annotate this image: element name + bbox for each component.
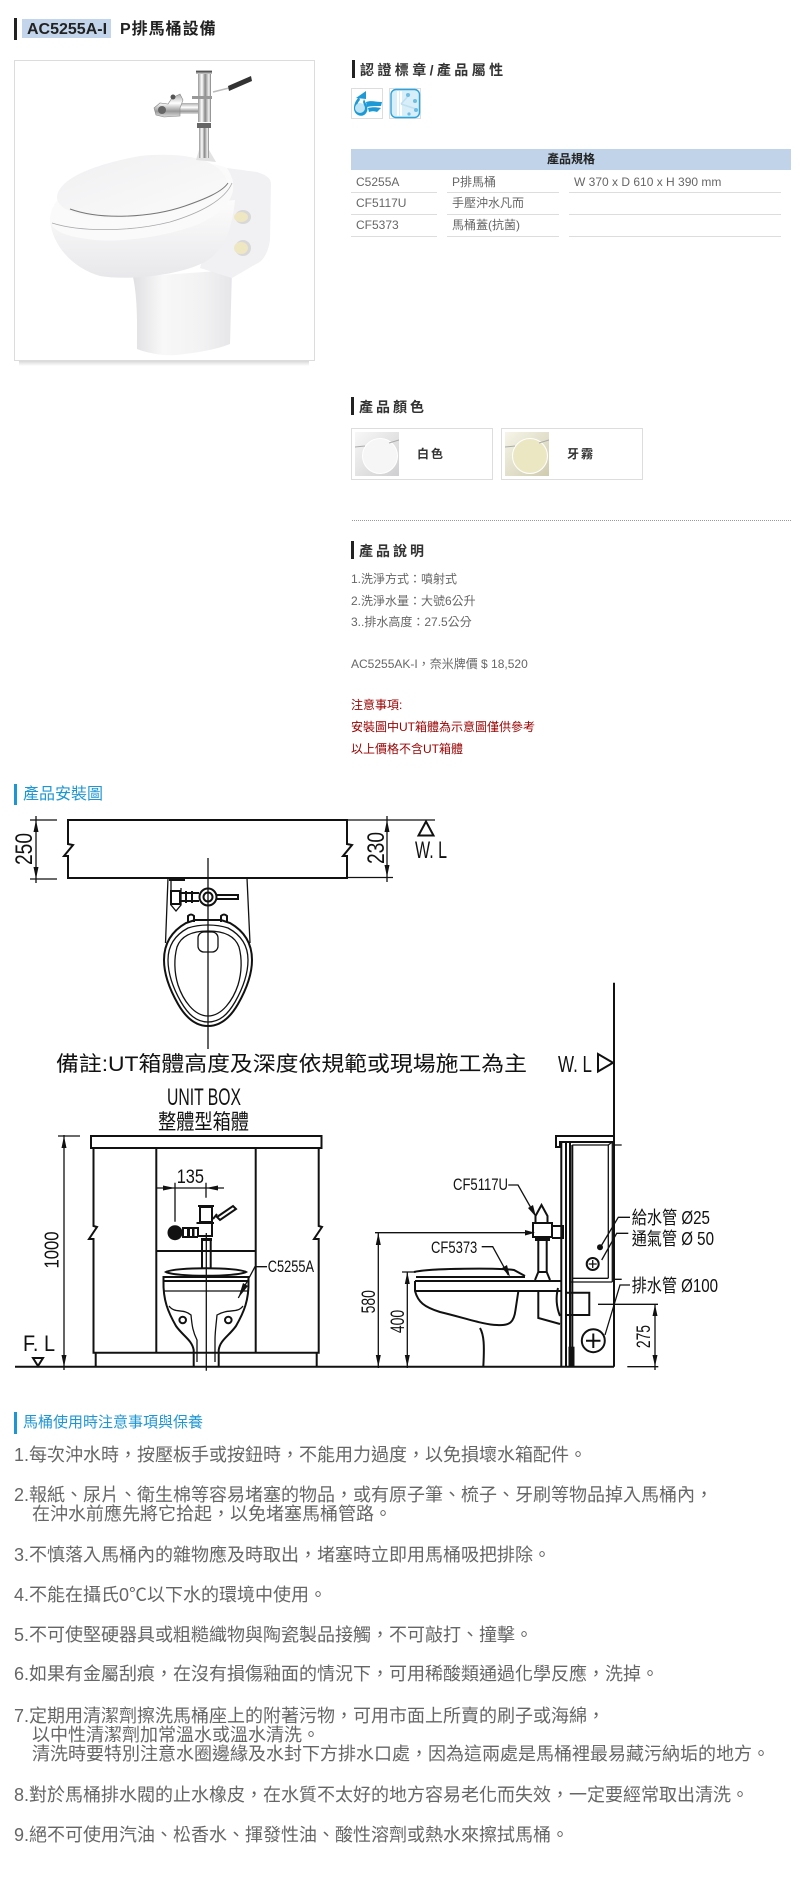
table: product specifications: P排馬桶 bbox=[452, 175, 496, 189]
text block: maintenance list: 9.絕不可使用汽油、松香水、揮發性油、酸性溶劑或熱水來擦拭馬桶。 bbox=[14, 1825, 569, 1845]
side elevation: water line and wall: W. L bbox=[558, 1051, 592, 1077]
table: product specifications: C5255A bbox=[356, 175, 399, 189]
text block: maintenance list: 4.不能在攝氏0℃以下水的環境中使用。 bbox=[14, 1585, 327, 1605]
front elevation: unit box: UNIT BOX bbox=[167, 1084, 241, 1111]
callout: red notes: 安裝圖中UT箱體為示意圖僅供參考 bbox=[351, 720, 535, 734]
plan view: wall section with dimensions: 230 bbox=[363, 832, 390, 864]
title: product model and name: P排馬桶設備 bbox=[120, 21, 217, 38]
heading: product colours: 產品顏色 bbox=[359, 399, 427, 415]
side elevation: wall unit box and piping bbox=[556, 1136, 718, 1370]
text block: maintenance list: 3.不慎落入馬桶內的雜物應及時取出，堵塞時立即用馬桶吸把排除。 bbox=[14, 1545, 551, 1565]
table: product specifications: 馬桶蓋(抗菌) bbox=[452, 218, 520, 232]
table: product specifications: 產品規格 bbox=[547, 152, 595, 166]
callout: red notes: 以上價格不含UT箱體 bbox=[351, 742, 463, 756]
text block: maintenance list: 2.報紙、尿片、衛生棉等容易堵塞的物品，或有原子筆、梳子、牙刷等物品掉入馬桶內， bbox=[14, 1485, 713, 1505]
dimensions: height of valve and seat bbox=[359, 1232, 416, 1368]
text block: maintenance list: 清洗時要特別注意水圈邊緣及水封下方排水口處，因為這兩處是馬桶裡最易藏污納垢的地方。 bbox=[32, 1744, 770, 1764]
chart: installation technical drawing bbox=[11, 816, 718, 1371]
table: product specifications: CF5117U bbox=[356, 196, 406, 210]
plan view: wall section with dimensions: W. L bbox=[415, 837, 447, 864]
text block: product description: 3..排水高度：27.5公分 bbox=[351, 615, 472, 629]
title: product model and name bbox=[14, 18, 217, 40]
text block: maintenance list: 8.對於馬桶排水閥的止水橡皮，在水質不太好的地方容易老化而失效，一定要經常取出清洗。 bbox=[14, 1785, 749, 1805]
front elevation: flush valve and toilet bbox=[163, 1206, 314, 1371]
side elevation: toilet profile with flush valve: CF5117U bbox=[453, 1175, 508, 1194]
text block: product description bbox=[351, 572, 528, 671]
callout: red notes: 注意事項: bbox=[351, 698, 402, 712]
table: product specifications: CF5373 bbox=[356, 218, 399, 232]
plan view: wall section with dimensions: 250 bbox=[11, 833, 38, 865]
heading: installation diagram: 產品安裝圖 bbox=[23, 786, 103, 803]
icon: toilet ceramic body bbox=[50, 155, 271, 355]
text block: maintenance list: 以中性清潔劑加常溫水或溫水清洗。 bbox=[32, 1725, 320, 1745]
table: product specifications bbox=[351, 149, 791, 237]
side elevation: toilet profile with flush valve bbox=[375, 1175, 563, 1367]
plan view: wall section with dimensions bbox=[11, 816, 447, 883]
front elevation: unit box: 1000 bbox=[41, 1232, 63, 1269]
dimensions: height of valve and seat: 580 bbox=[359, 1290, 380, 1313]
heading: usage and maintenance notes: 馬桶使用時注意事項與保養 bbox=[23, 1414, 203, 1431]
colour swatch: ivory bbox=[501, 428, 643, 480]
front elevation: unit box: 135 bbox=[177, 1167, 204, 1188]
dimensions: height of valve and seat: 400 bbox=[388, 1310, 409, 1333]
front elevation: unit box bbox=[15, 1084, 614, 1370]
colour swatch: ivory: 牙霧 bbox=[567, 447, 595, 461]
heading: product description: 產品說明 bbox=[359, 543, 427, 559]
side elevation: toilet profile with flush valve: CF5373 bbox=[431, 1238, 477, 1257]
heading: certification section: 認證標章/產品屬性 bbox=[360, 62, 506, 78]
icon: antibacterial glaze badge bbox=[389, 88, 421, 119]
text block: maintenance list: 1.每次沖水時，按壓板手或按鈕時，不能用力過度，以免損壞水箱配件。 bbox=[14, 1445, 587, 1465]
icon: chrome flush valve bbox=[154, 70, 252, 162]
colour swatch: white bbox=[351, 428, 493, 480]
colour swatch: white: 白色 bbox=[417, 447, 445, 461]
side elevation: water line and wall bbox=[558, 983, 614, 1367]
front elevation: unit box: F. L bbox=[23, 1331, 55, 1356]
side elevation: wall unit box and piping: 275 bbox=[634, 1325, 655, 1348]
panel: product photo of wall-mounted toilet bbox=[14, 60, 315, 365]
text block: product description: 2.洗淨水量：大號6公升 bbox=[351, 594, 476, 608]
callout: red notes bbox=[351, 698, 535, 756]
side elevation: wall unit box and piping: 給水管 Ø25 bbox=[632, 1208, 710, 1228]
title: product model and name: AC5255A-I bbox=[27, 21, 107, 38]
text block: product description: AC5255AK-I，奈米牌價 $ 18,520 bbox=[351, 657, 528, 671]
table: product specifications: W 370 x D 610 x H 390 mm bbox=[574, 175, 721, 189]
side elevation: wall unit box and piping: 排水管 Ø100 bbox=[632, 1276, 718, 1296]
text block: maintenance list: 在沖水前應先將它拾起，以免堵塞馬桶管路。 bbox=[32, 1504, 392, 1524]
plan view: toilet from above bbox=[164, 858, 252, 1049]
side elevation: wall unit box and piping: 通氣管 Ø 50 bbox=[632, 1229, 714, 1249]
note: UT box height per site: 備註:UT箱體高度及深度依規範或現場施工為主 bbox=[56, 1053, 527, 1076]
text block: maintenance list bbox=[14, 1445, 770, 1845]
text block: maintenance list: 5.不可使堅硬器具或粗糙織物與陶瓷製品接觸，不可敲打、撞擊。 bbox=[14, 1625, 533, 1645]
table: product specifications: 手壓沖水凡而 bbox=[452, 196, 524, 210]
front elevation: unit box: 整體型箱體 bbox=[158, 1111, 249, 1134]
text block: product description: 1.洗淨方式：噴射式 bbox=[351, 572, 457, 586]
text block: maintenance list: 7.定期用清潔劑擦洗馬桶座上的附著污物，可用市面上所賣的刷子或海綿， bbox=[14, 1706, 605, 1726]
front elevation: flush valve and toilet: C5255A bbox=[268, 1257, 314, 1276]
text block: maintenance list: 6.如果有金屬刮痕，在沒有損傷釉面的情況下，可用稀酸類通過化學反應，洗掉。 bbox=[14, 1664, 659, 1684]
icon: water saving badge bbox=[351, 88, 383, 119]
